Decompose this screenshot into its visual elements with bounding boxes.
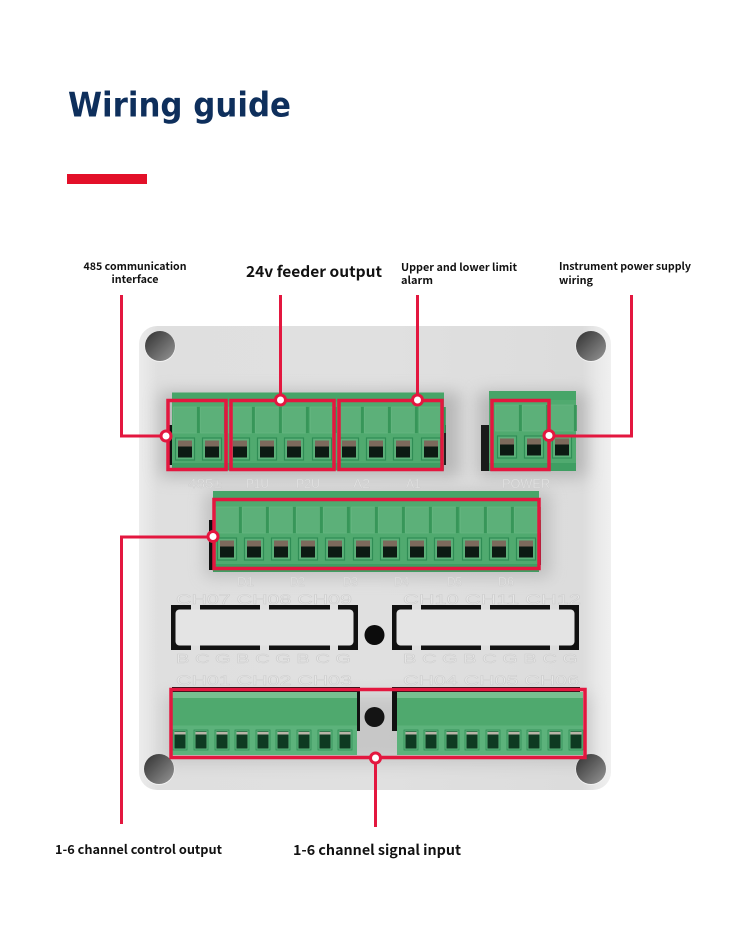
label: upper and lower limit alarm: Upper and lower limit <box>401 260 518 275</box>
embossed panel markings: A1 <box>406 476 421 491</box>
embossed panel markings: CH04 CH05 CH06 <box>403 672 579 688</box>
title: Wiring guide <box>68 86 291 126</box>
connector slot: left empty <box>171 605 358 650</box>
panel: instrument back plate <box>139 326 611 790</box>
embossed panel markings: POWER <box>502 476 550 491</box>
embossed panel markings: CH01 CH02 CH03 <box>176 672 352 688</box>
leader line: alarm <box>416 295 419 400</box>
leader line: power <box>549 295 632 436</box>
embossed panel markings: P2U <box>296 476 320 491</box>
label: 485 communication interface <box>84 259 186 287</box>
label: 485 communication interface: interface <box>112 272 158 287</box>
label: instrument power supply wiring <box>559 259 691 288</box>
embossed panel markings: D2 <box>290 574 305 589</box>
connector slot: right empty <box>392 605 579 650</box>
terminal block: bottom right 9 pin <box>392 687 583 755</box>
label: upper and lower limit alarm: alarm <box>401 273 433 288</box>
embossed panel markings: P1U <box>246 476 269 491</box>
label: instrument power supply wiring: Instrument power supply <box>559 259 691 274</box>
terminal block: top row 10 pin <box>168 392 446 470</box>
label: 1-6 channel signal input: 1-6 channel signal input <box>293 840 461 860</box>
embossed panel markings <box>176 476 581 688</box>
terminal block: power 3 pin <box>481 391 577 471</box>
label: 485 communication interface: 485 communication <box>84 259 186 274</box>
leader line: 485 interface <box>122 295 166 436</box>
embossed panel markings: 485± <box>188 476 222 491</box>
embossed panel markings: D5 <box>447 574 462 589</box>
embossed panel markings: D6 <box>498 574 514 589</box>
embossed panel markings: CH07 CH08 CH09 <box>176 591 352 607</box>
terminal block: middle row 12 pin <box>209 491 541 572</box>
embossed panel markings: A2 <box>353 476 370 491</box>
embossed panel markings: D4 <box>394 574 409 589</box>
callout boxes <box>168 400 585 758</box>
label: 24v feeder output: 24v feeder output <box>246 261 383 282</box>
embossed panel markings: B C G B C G B C G <box>176 651 351 666</box>
leader line: 24v feeder <box>279 295 282 400</box>
title accent bar <box>67 174 147 184</box>
label: upper and lower limit alarm <box>401 260 518 288</box>
embossed panel markings: CH10 CH11 CH12 <box>403 591 581 607</box>
label: instrument power supply wiring: wiring <box>559 273 594 288</box>
embossed panel markings: D3 <box>343 574 358 589</box>
leader line: control output <box>122 537 213 824</box>
connection dots <box>161 395 554 763</box>
embossed panel markings: D1 <box>237 574 254 589</box>
label: 1-6 channel control output: 1-6 channel control output <box>55 839 223 858</box>
leader line: signal input <box>374 758 377 827</box>
embossed panel markings: B C G B C G B C G <box>403 651 578 666</box>
terminal block: bottom left 9 pin <box>172 687 360 755</box>
